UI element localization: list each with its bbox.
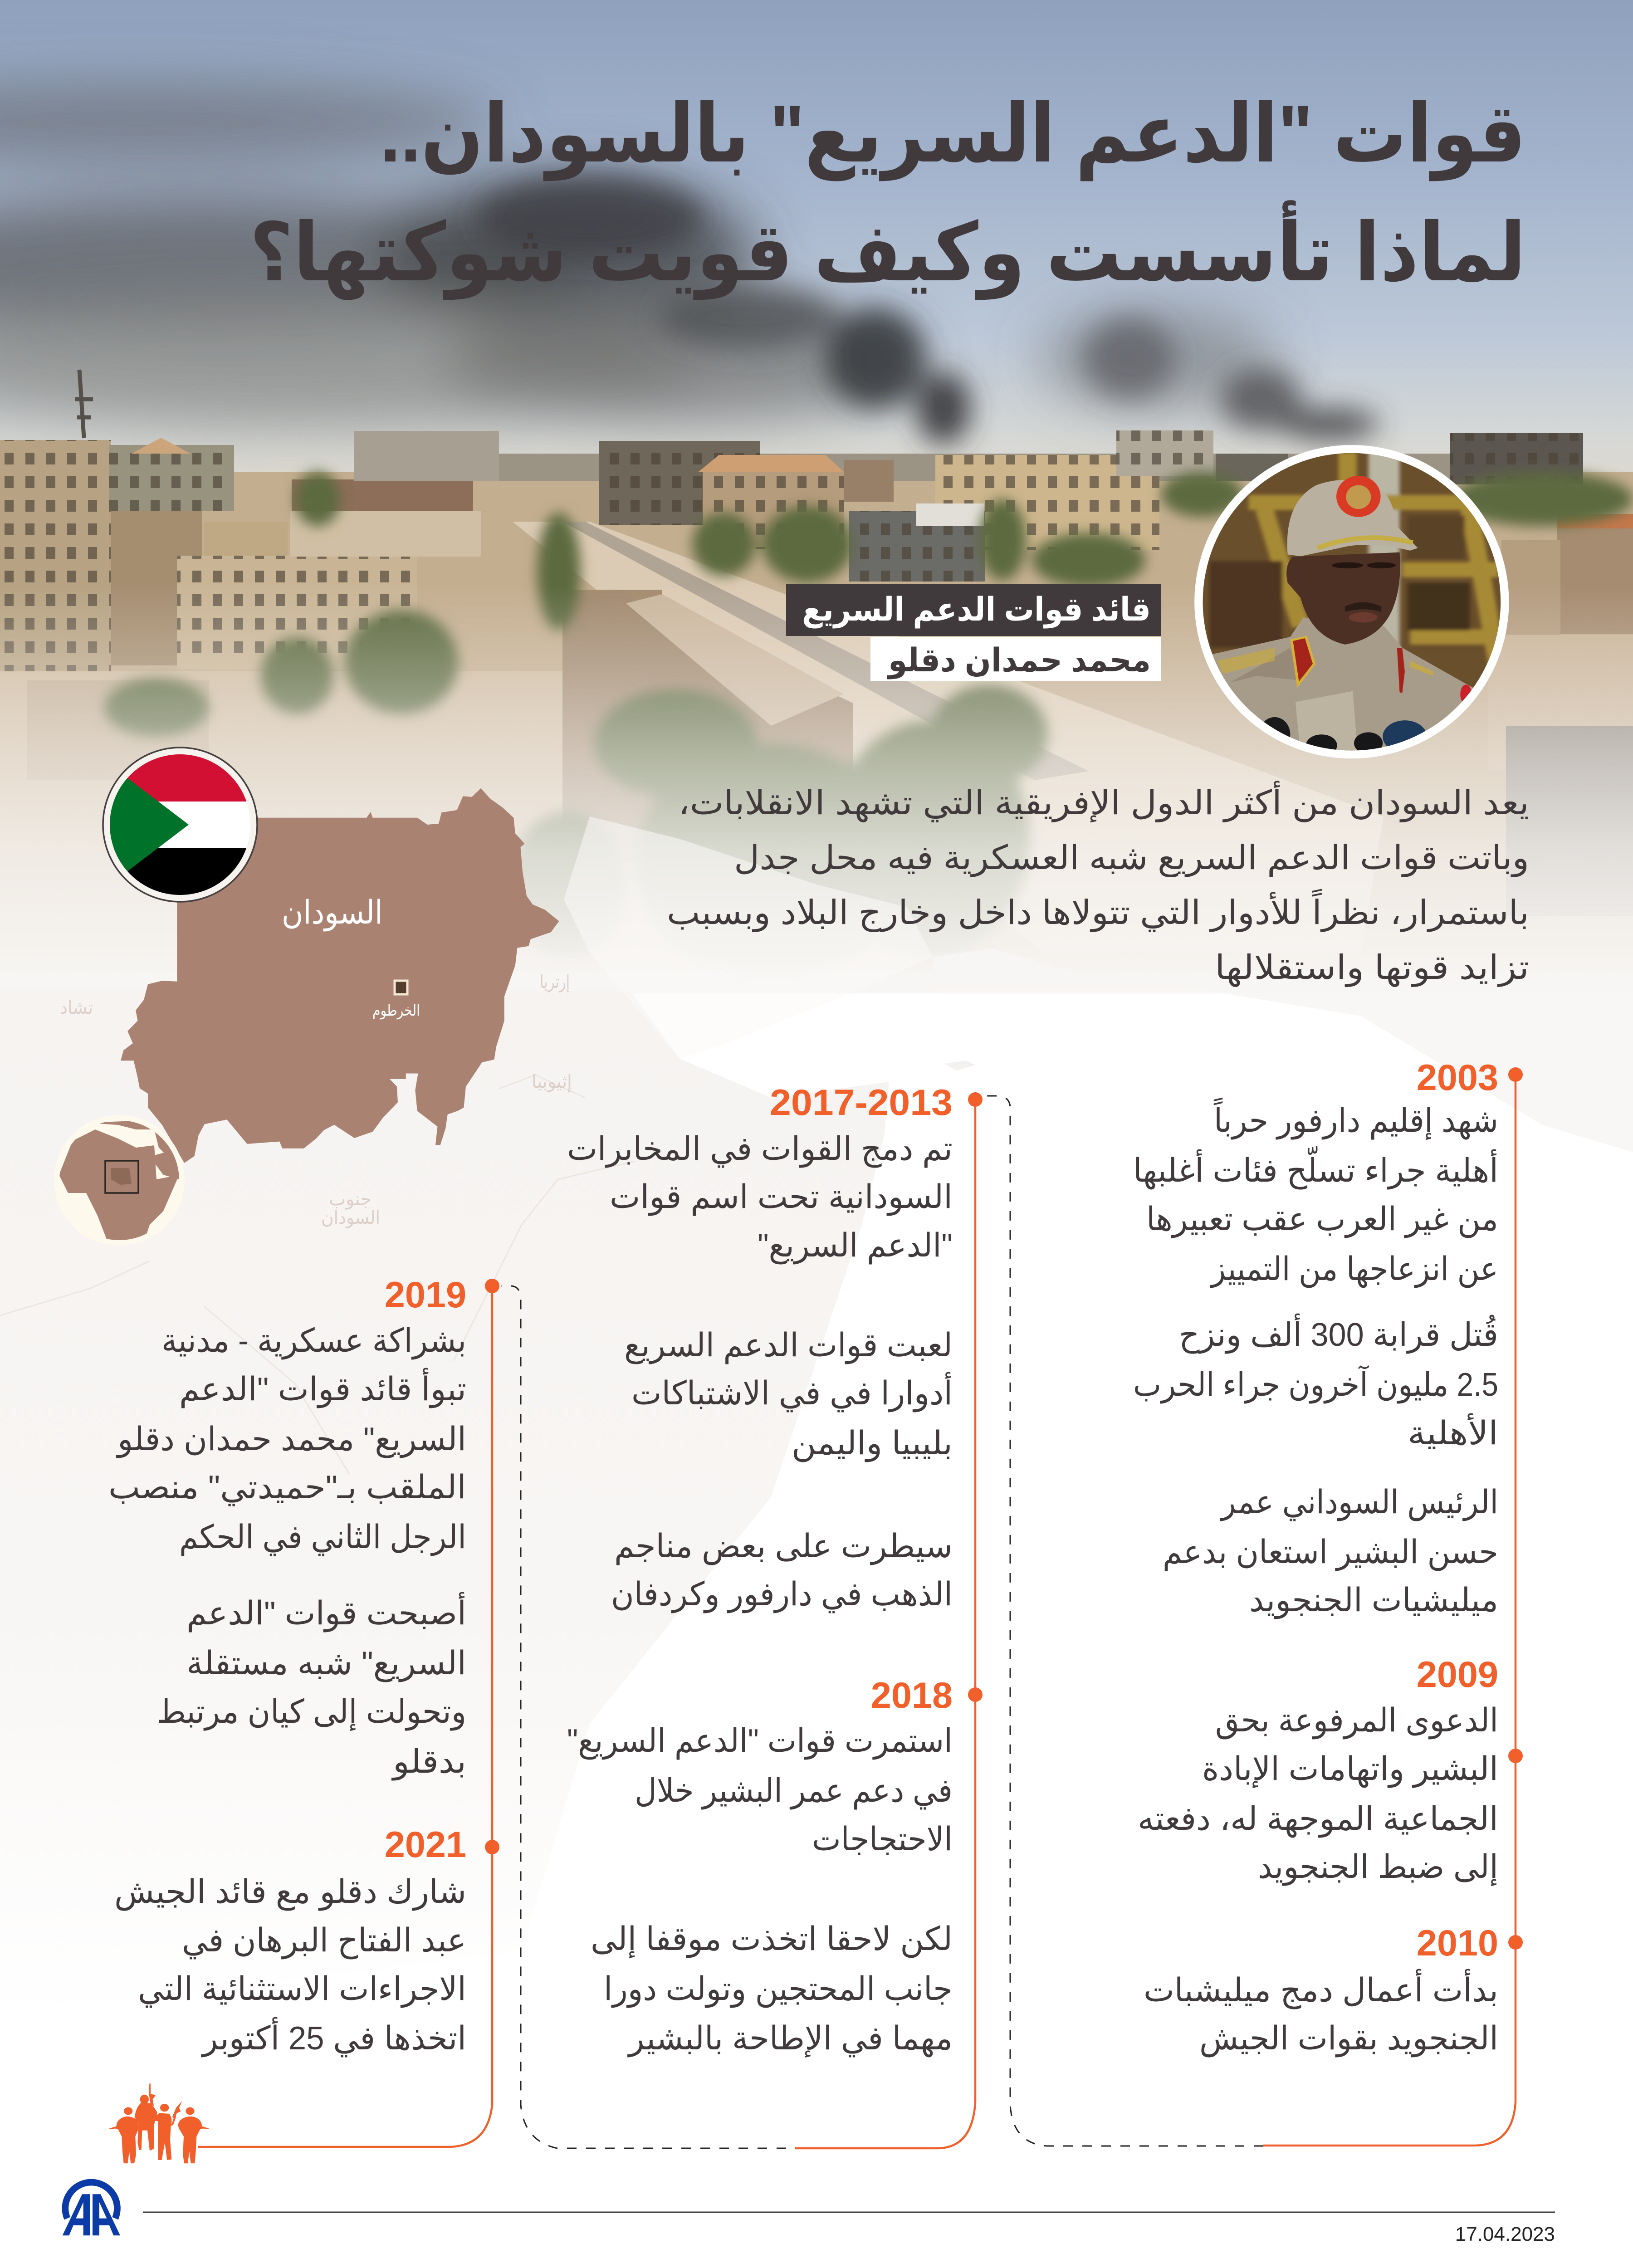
- timeline entry: 2003: عن انزعاجها من التمييز: [1210, 1251, 1498, 1288]
- intro paragraph: وباتت قوات الدعم السريع شبه العسكرية فيه محل جدل: [734, 839, 1529, 877]
- timeline entry: 2010: بدأت أعمال دمج ميليشبات: [1144, 1969, 1498, 2009]
- timeline entry: 2019: بدقلو: [391, 1744, 466, 1781]
- timeline entry: 2013-2017: الذهب في دارفور وكردفان: [611, 1576, 953, 1613]
- timeline entry: 2018: جانب المحتجين وتولت دورا: [604, 1971, 953, 2008]
- timeline entry: 2013-2017: سيطرت على بعض مناجم: [614, 1528, 953, 1565]
- caption: leader role: [786, 584, 1161, 636]
- background photo: Khartoum skyline with smoke: [0, 0, 1633, 993]
- Khartoum marker: [395, 981, 407, 994]
- intro paragraph: تزايد قوتها واستقلالها: [1215, 948, 1529, 987]
- timeline entry: 2003: الأهلية: [1408, 1413, 1498, 1452]
- road: [513, 522, 1384, 953]
- neighbouring country labels: جنوب: [329, 1189, 372, 1210]
- timeline entry: 2009: إلى ضبط الجنجويد: [1258, 1849, 1498, 1886]
- title: [249, 88, 1526, 300]
- timeline entry: 2021: [114, 1824, 466, 2058]
- timeline entry: 2018: [567, 1675, 953, 2058]
- date: 17.04.2023: [1455, 2223, 1555, 2245]
- intro paragraph: [667, 781, 1529, 987]
- timeline entry: 2021: 2021: [385, 1824, 466, 1865]
- timeline entry: 2021: الاجراءات الاستثنائية التي: [138, 1971, 466, 2008]
- neighbouring country labels: السودان: [321, 1208, 380, 1228]
- neighbouring country labels: تشاد: [60, 998, 93, 1018]
- timeline entry: 2021: اتخذها في 25 أكتوبر: [201, 2017, 466, 2058]
- timeline entry: 2003: أهلية جراء تسلّح فئات أغلبها: [1133, 1146, 1498, 1190]
- timeline entry: 2003: 2003: [1417, 1057, 1498, 1098]
- timeline entry: 2009: الدعوى المرفوعة بحق: [1215, 1702, 1498, 1740]
- portrait of the commander: [1194, 445, 1509, 758]
- timeline entry: 2009: 2009: [1417, 1654, 1498, 1695]
- timeline entry: 2003: من غير العرب عقب تعبيرها: [1146, 1201, 1498, 1238]
- timeline entry: 2003: حسن البشير استعان بدعم: [1163, 1534, 1498, 1571]
- antenna mast: [75, 370, 93, 438]
- map of Sudan: [121, 788, 559, 1163]
- caption: leader name: محمد حمدان دقلو: [887, 642, 1151, 679]
- timeline entry: 2019: تبوأ قائد قوات "الدعم: [179, 1368, 466, 1408]
- white sea wedge: [564, 816, 933, 1059]
- timeline entry: 2019: أصبحت قوات "الدعم: [186, 1592, 466, 1633]
- timeline entry: 2019: بشراكة عسكرية - مدنية: [161, 1323, 466, 1360]
- timeline entry: 2018: في دعم عمر البشير خلال: [635, 1773, 953, 1810]
- smoke clouds: [0, 82, 1379, 445]
- timeline entry: 2019: [108, 1275, 466, 1781]
- trees: [104, 472, 1633, 980]
- timeline entry: 2013-2017: 2017-2013: [770, 1082, 953, 1123]
- icon: soldiers silhouette: [108, 2083, 211, 2163]
- timeline entry: 2018: لكن لاحقا اتخذت موقفا إلى: [591, 1921, 953, 1958]
- neighbouring country labels: إرتريا: [540, 972, 570, 992]
- timeline entry: 2019: الرجل الثاني في الحكم: [179, 1519, 466, 1556]
- caption: leader role: قائد قوات الدعم السريع: [802, 591, 1151, 629]
- timeline entry: 2021: عبد الفتاح البرهان في: [182, 1922, 466, 1960]
- timeline entry: 2003: ميليشيات الجنجويد: [1249, 1582, 1498, 1619]
- cap: [1287, 480, 1418, 556]
- timeline entry: 2013-2017: بليبيا واليمن: [792, 1425, 953, 1462]
- timeline entry: 2009: البشير واتهامات الإبادة: [1202, 1751, 1498, 1788]
- timeline entry: 2013-2017: [567, 1082, 953, 1613]
- neighbouring country labels: [60, 972, 572, 1228]
- timeline entry: 2019: الملقب بـ"حميدتي" منصب: [108, 1469, 466, 1506]
- timeline entry: 2013-2017: تم دمج القوات في المخابرات: [567, 1131, 953, 1168]
- fade to light: [0, 585, 1633, 993]
- timeline column 1: line: [983, 1067, 1523, 2146]
- timeline entry: 2018: 2018: [871, 1675, 953, 1716]
- timeline entry: 2013-2017: أدوارا في في الاشتباكات: [631, 1372, 953, 1413]
- timeline entry: 2010: 2010: [1417, 1923, 1498, 1964]
- timeline entry: 2003: الرئيس السوداني عمر: [1220, 1484, 1498, 1521]
- label: Khartoum: الخرطوم: [372, 1002, 420, 1020]
- timeline entry: 2019: وتحولت إلى كيان مرتبط: [157, 1694, 466, 1731]
- timeline entry: 2009: الجماعية الموجهة له، دفعته: [1138, 1801, 1498, 1838]
- title: قوات "الدعم السريع" بالسودان..: [380, 88, 1526, 181]
- timeline entry: 2003: قُتل قرابة 300 ألف ونزح: [1179, 1313, 1498, 1354]
- intro paragraph: باستمرار، نظراً للأدوار التي تتولاها داخل وخارج البلاد وبسبب: [667, 889, 1529, 932]
- background map land: [0, 948, 1633, 2268]
- timeline column 3: line: [198, 1279, 499, 2147]
- timeline entry: 2010: [1144, 1923, 1498, 2058]
- timeline entry: 2013-2017: لعبت قوات الدعم السريع: [624, 1327, 953, 1364]
- face: [1286, 552, 1400, 645]
- timeline entry: 2018: الاحتجاجات: [812, 1821, 953, 1857]
- label: Sudan: السودان: [282, 894, 383, 932]
- timeline entry: 2018: مهما في الإطاحة بالبشير: [627, 2020, 953, 2058]
- logo: Anadolu Agency: [63, 2182, 120, 2235]
- timeline entry: 2009: [1138, 1654, 1498, 1886]
- timeline entry: 2010: الجنجويد بقوات الجيش: [1199, 2020, 1498, 2058]
- footer rule: [143, 2212, 1555, 2213]
- timeline column 2: line: [501, 1092, 983, 2148]
- locator globe: [54, 1115, 185, 1246]
- timeline entry: 2013-2017: "الدعم السريع": [758, 1227, 953, 1265]
- Sudan flag: [103, 748, 257, 902]
- ground: [0, 472, 1633, 971]
- neighbouring country labels: إثيوبيا: [532, 1072, 572, 1092]
- timeline entry: 2013-2017: السودانية تحت اسم قوات: [610, 1179, 953, 1216]
- uniform: [1212, 617, 1473, 751]
- timeline entry: 2019: 2019: [385, 1275, 466, 1315]
- timeline entry: 2003: شهد إقليم دارفور حرباً: [1213, 1097, 1498, 1140]
- timeline entry: 2019: السريع" محمد حمدان دقلو: [116, 1421, 466, 1458]
- timeline entry: 2019: السريع" شبه مستقلة: [186, 1645, 466, 1682]
- timeline entry: 2003: 2.5 مليون آخرون جراء الحرب: [1133, 1365, 1498, 1404]
- timeline entry: 2018: استمرت قوات "الدعم السريع": [567, 1723, 953, 1760]
- timeline entry: 2021: شارك دقلو مع قائد الجيش: [114, 1874, 466, 1911]
- timeline entry: 2003: [1133, 1057, 1498, 1619]
- title: لماذا تأسست وكيف قويت شوكتها؟: [249, 200, 1526, 300]
- microphones: [1259, 717, 1290, 752]
- intro paragraph: يعد السودان من أكثر الدول الإفريقية التي تشهد الانقلابات،: [678, 781, 1529, 822]
- buildings: [0, 430, 1633, 966]
